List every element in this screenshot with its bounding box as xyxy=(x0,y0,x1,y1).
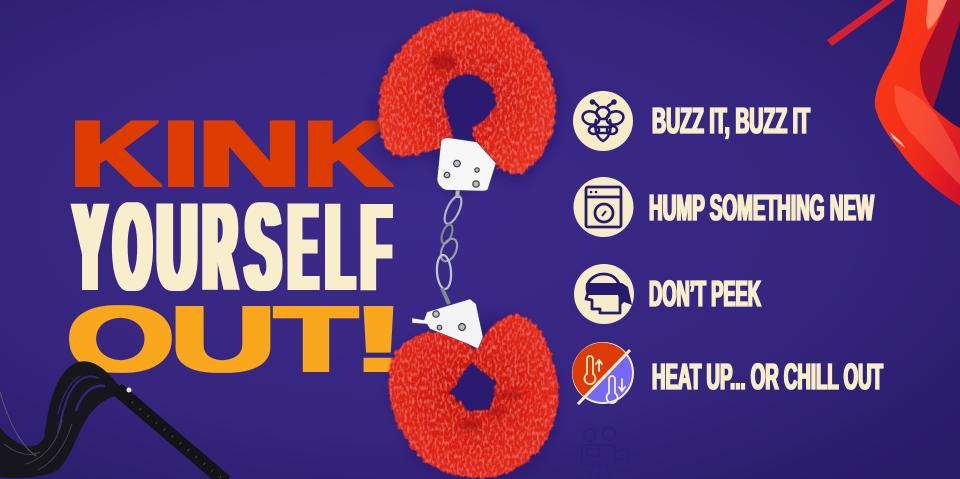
title line: YOURSELF: E xyxy=(289,177,317,317)
whip handle ridges xyxy=(132,402,222,479)
title line: OUT!: O xyxy=(67,287,174,391)
title line: OUT!: U xyxy=(170,287,276,391)
label: BUZZ IT, BUZZ IT xyxy=(652,100,810,141)
title line: KINK xyxy=(70,101,392,207)
top fur shadow patch xyxy=(429,53,457,71)
title line: KINK: I xyxy=(163,101,199,207)
chain xyxy=(436,189,465,304)
top metal plate xyxy=(437,138,496,191)
whip strand highlights xyxy=(4,420,72,470)
title line: YOURSELF: F xyxy=(362,177,390,317)
title line: YOURSELF: U xyxy=(158,178,196,317)
list item: don't peek xyxy=(574,264,761,324)
title line: KINK: N xyxy=(198,101,301,206)
title line: KINK: K xyxy=(303,101,392,207)
title line: YOURSELF: Y xyxy=(74,178,106,318)
title line: OUT!: ! xyxy=(352,288,405,391)
icon: blindfolded head xyxy=(574,264,634,324)
bottom fur cuff xyxy=(389,315,558,478)
title line: YOURSELF: R xyxy=(204,177,236,317)
list item: hump something new xyxy=(574,177,874,237)
icon: washing machine xyxy=(574,177,634,237)
bottom fur shadow patch xyxy=(458,391,524,431)
title line: KINK: K xyxy=(70,101,160,206)
whip stud xyxy=(126,388,132,392)
whip tails xyxy=(0,361,122,478)
title line: OUT!: T xyxy=(275,287,357,391)
shoe body xyxy=(875,0,960,206)
handcuffs xyxy=(372,10,560,479)
whip xyxy=(0,361,226,479)
high heel shoe xyxy=(827,0,960,206)
icon: bee xyxy=(573,91,633,151)
shoe dark right xyxy=(933,22,960,128)
whip strand gaps xyxy=(0,376,104,456)
heel spike xyxy=(827,0,895,46)
list item: heat up or chill out xyxy=(572,343,883,404)
bottom metal plate xyxy=(412,299,483,349)
cuff shadow xyxy=(372,10,560,479)
title line: OUT! xyxy=(67,287,405,391)
title xyxy=(67,101,405,391)
title line: YOURSELF: O xyxy=(115,177,150,317)
shoe inner dark xyxy=(920,0,960,108)
top fur cuff xyxy=(379,10,556,174)
whip handle xyxy=(117,389,226,479)
shoe highlights xyxy=(894,85,960,185)
icon: faint film camera xyxy=(582,428,628,479)
label: DON’T PEEK xyxy=(649,273,761,314)
title line: YOURSELF: S xyxy=(246,179,280,317)
list item: buzz it xyxy=(573,91,810,151)
title line: YOURSELF: L xyxy=(327,177,353,317)
icon: crossed thermometers xyxy=(572,343,633,404)
title line: YOURSELF xyxy=(74,177,390,318)
